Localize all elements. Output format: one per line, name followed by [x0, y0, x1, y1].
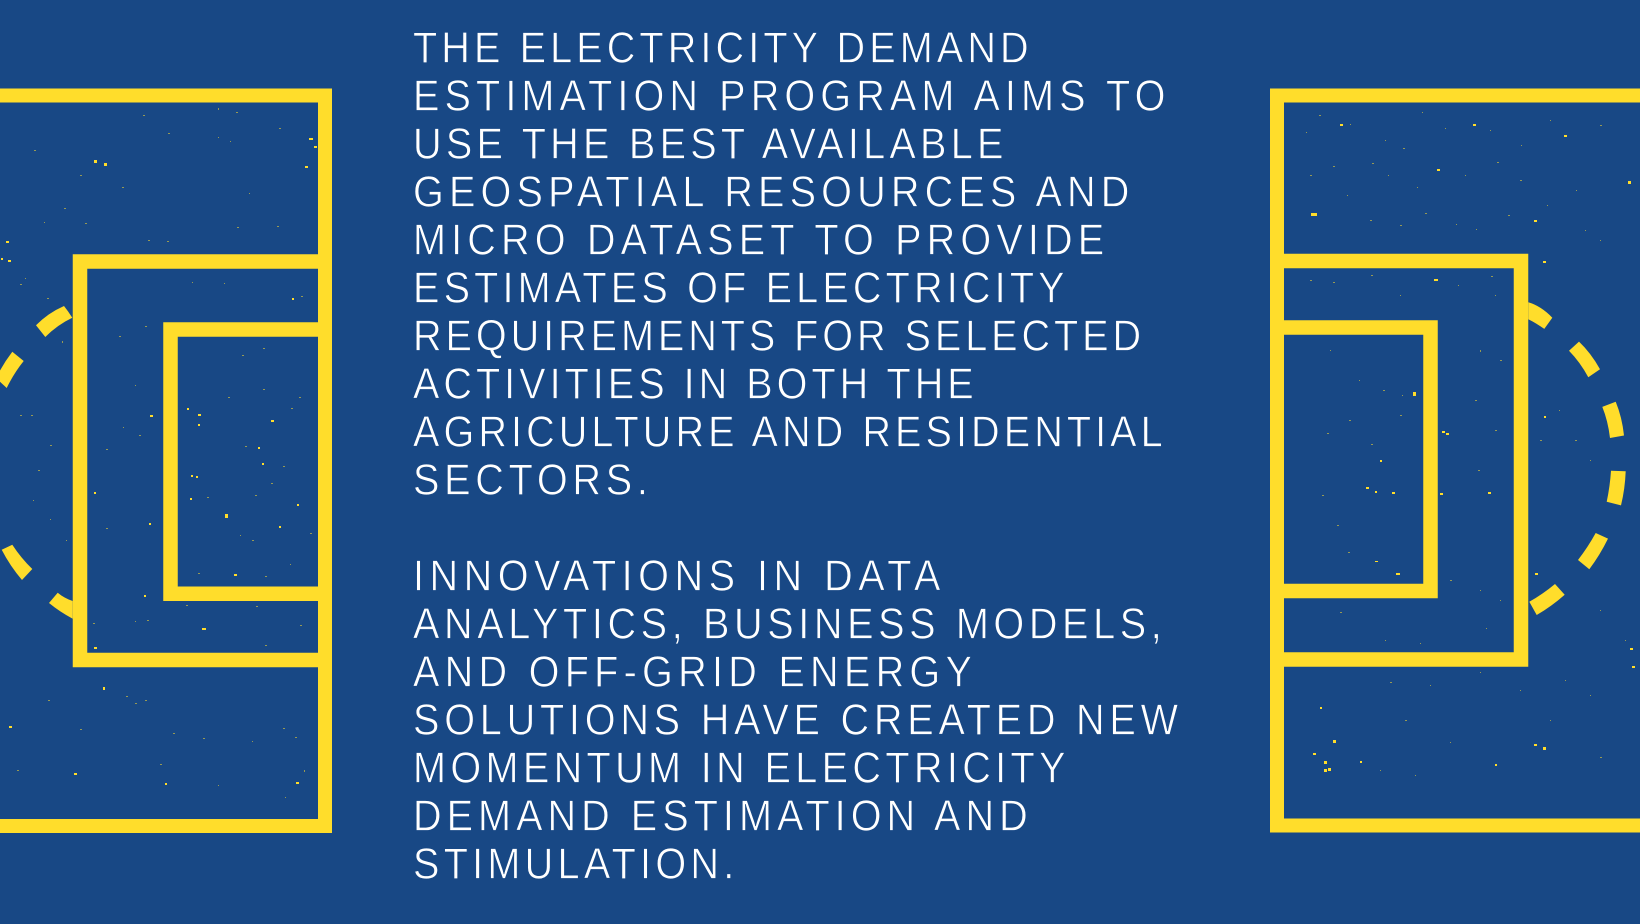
left decoration: nested frames with dashed arc: [0, 96, 325, 826]
paragraph: program aims: SECTORS.: [413, 455, 648, 504]
paragraph: program aims: GEOSPATIAL RESOURCES AND: [413, 167, 1129, 216]
paragraph: innovations: DEMAND ESTIMATION AND: [413, 791, 1028, 840]
left speckle texture: [1, 108, 317, 798]
right dashed arc: [1528, 302, 1626, 615]
left outer frame: [0, 96, 325, 826]
paragraph: innovations: MOMENTUM IN ELECTRICITY: [413, 743, 1066, 792]
paragraph: innovations: STIMULATION.: [413, 839, 734, 888]
paragraph: innovations: SOLUTIONS HAVE CREATED NEW: [413, 695, 1178, 744]
paragraph: innovations: INNOVATIONS IN DATA: [413, 551, 940, 600]
paragraph: innovations: ANALYTICS, BUSINESS MODELS,: [413, 599, 1162, 648]
paragraph: program aims: USE THE BEST AVAILABLE: [413, 119, 1003, 168]
paragraph: program aims: REQUIREMENTS FOR SELECTED: [413, 311, 1141, 360]
paragraph: program aims: MICRO DATASET TO PROVIDE: [413, 215, 1104, 264]
right decoration: nested frames with dashed arc: [1277, 96, 1640, 826]
paragraph: program aims: ACTIVITIES IN BOTH THE: [413, 359, 974, 408]
right middle frame: [1280, 261, 1521, 660]
paragraph: innovations: [413, 551, 1178, 888]
left inner frame: [170, 330, 320, 594]
paragraph: program aims: THE ELECTRICITY DEMAND: [413, 23, 1029, 72]
paragraph: program aims: AGRICULTURE AND RESIDENTIAL: [413, 407, 1163, 456]
paragraph: program aims: [413, 23, 1165, 504]
left dashed arc: [0, 306, 73, 619]
paragraph: innovations: AND OFF-GRID ENERGY: [413, 647, 972, 696]
paragraph: program aims: ESTIMATES OF ELECTRICITY: [413, 263, 1065, 312]
paragraph: program aims: ESTIMATION PROGRAM AIMS TO: [413, 71, 1165, 120]
right outer frame: [1277, 96, 1640, 826]
left middle frame: [80, 262, 320, 660]
right speckle texture: [1306, 112, 1635, 776]
right inner frame: [1280, 328, 1430, 591]
